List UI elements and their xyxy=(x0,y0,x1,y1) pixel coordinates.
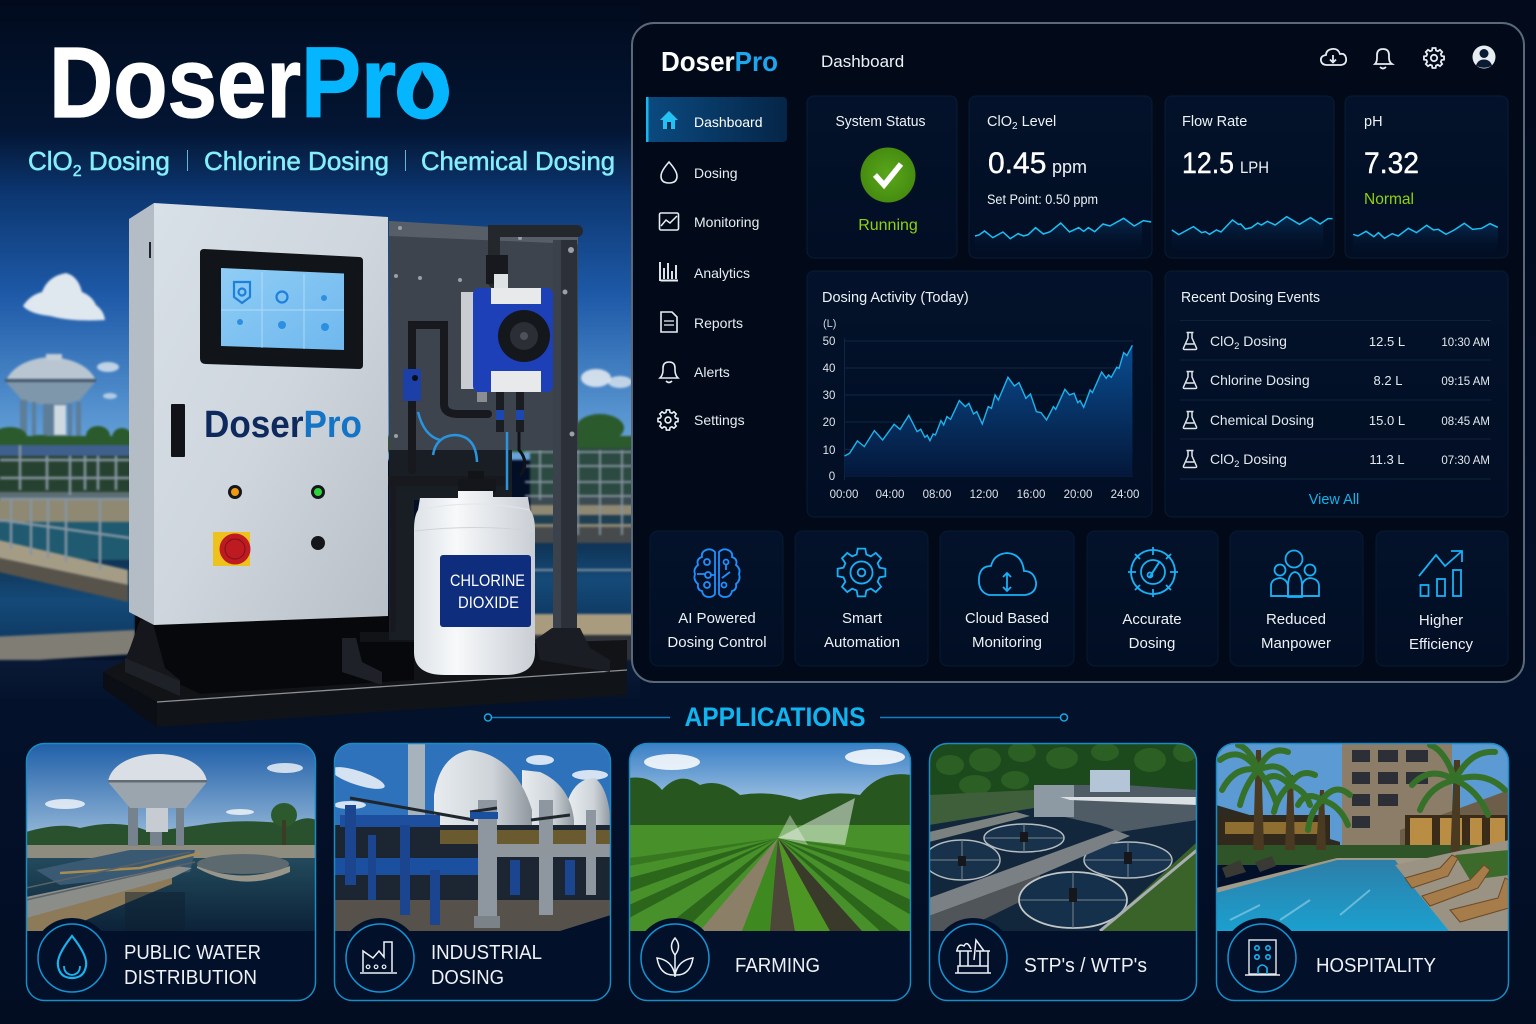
title logo: DoserPro: Doser xyxy=(49,27,301,139)
feature: AI powered dosing control xyxy=(650,531,783,666)
right plant and piers xyxy=(524,448,631,661)
event row 4 xyxy=(1183,450,1490,470)
nav: Analytics: Analytics xyxy=(694,265,750,281)
subtitle: dosing types: Dosing xyxy=(82,146,170,176)
card: ClO2 level: Set Point: 0.50 ppm xyxy=(987,192,1098,207)
event row 1: 12.5 L xyxy=(1369,334,1405,349)
panel: dosing activity chart: (L) xyxy=(823,318,836,330)
feature: smart automation: Smart xyxy=(842,610,883,627)
card: pH xyxy=(1345,96,1508,258)
event row 4: 2 xyxy=(1234,459,1239,470)
feature: reduced manpower: Manpower xyxy=(1261,635,1331,652)
nav: Analytics xyxy=(660,262,750,281)
event row 2 xyxy=(1183,372,1490,388)
photo: industrial pipes and tanks xyxy=(329,743,611,931)
x axis labels: 16:00 xyxy=(1017,489,1045,501)
nav: Monitoring xyxy=(660,213,759,230)
card label: PUBLIC WATER xyxy=(124,941,261,964)
badge icon: water drop xyxy=(32,918,112,998)
application card: public water distribution xyxy=(26,743,316,1001)
hero background scene: treatment plant and sky xyxy=(0,41,639,678)
door handle xyxy=(171,404,185,457)
card label xyxy=(431,941,542,989)
sparkline xyxy=(975,218,1151,253)
x axis labels: 12:00 xyxy=(970,489,998,501)
pipes xyxy=(389,231,577,630)
card: flow rate xyxy=(1165,96,1334,258)
card: ClO2 level xyxy=(969,96,1152,258)
subtitle: dosing types xyxy=(28,146,615,180)
feature: AI powered dosing control: Dosing Control xyxy=(667,634,767,651)
horizon trees xyxy=(0,414,650,452)
subtitle: dosing types: Chemical Dosing xyxy=(421,146,615,176)
x axis labels xyxy=(830,489,1139,501)
base platform xyxy=(103,640,627,727)
event row 3: Chemical Dosing xyxy=(1210,412,1314,428)
chemical tank: chlorine dioxide xyxy=(414,471,535,675)
application card: industrial dosing xyxy=(329,743,611,1001)
icon: brain xyxy=(694,549,740,597)
panel: dosing activity chart xyxy=(807,271,1152,517)
application card: hospitality xyxy=(1216,743,1509,1001)
feature: AI powered dosing control: AI Powered xyxy=(678,610,756,627)
subtitle: dosing types: ClO xyxy=(28,146,73,176)
dashboard heading: Dashboard xyxy=(821,52,904,71)
photo: water tower and clarifier xyxy=(26,743,316,931)
icon: cloud xyxy=(979,553,1036,595)
x axis labels: 20:00 xyxy=(1064,489,1092,501)
icon: settings gear xyxy=(1424,48,1444,68)
icon: running check xyxy=(860,148,916,202)
link: view all: View All xyxy=(1309,492,1359,508)
nav: Alerts xyxy=(660,362,730,382)
card label: FARMING xyxy=(735,954,820,977)
x axis labels: 08:00 xyxy=(923,489,951,501)
event row 3: 15.0 L xyxy=(1369,413,1405,428)
touch screen xyxy=(200,249,363,369)
card: flow rate: Flow Rate xyxy=(1182,114,1247,130)
nav: Dosing: Dosing xyxy=(694,165,738,181)
card: pH: 7.32 xyxy=(1364,147,1419,180)
card label: DISTRIBUTION xyxy=(124,966,257,989)
cabinet xyxy=(129,203,388,625)
sidebar navigation xyxy=(646,97,787,430)
support frame under cabinet xyxy=(125,610,414,696)
badge icon: treatment plant xyxy=(933,918,1013,998)
event row 3 xyxy=(1183,412,1490,428)
y axis labels: 40 xyxy=(823,363,835,375)
card: flow rate: 12.5 xyxy=(1182,147,1234,180)
icon: target xyxy=(1128,547,1178,597)
nav: Monitoring: Monitoring xyxy=(694,214,759,230)
x axis labels: 00:00 xyxy=(830,489,858,501)
cyan tubes xyxy=(418,412,507,490)
event row 4: ClO xyxy=(1210,451,1234,467)
emergency stop button xyxy=(213,532,250,566)
nav: Reports xyxy=(661,312,743,332)
y axis labels: 30 xyxy=(823,390,835,402)
application card: STPs and WTPs xyxy=(924,742,1197,1001)
card: ClO2 level: 2 xyxy=(1012,121,1018,132)
card: ClO2 level: 0.45 xyxy=(988,147,1046,180)
feature: accurate dosing xyxy=(1087,531,1218,666)
water tower xyxy=(5,354,96,448)
card label: STP's / WTP's xyxy=(1024,954,1147,977)
photo: crop field with sprinkler xyxy=(629,743,911,931)
y axis labels: 50 xyxy=(823,336,835,348)
feature: reduced manpower: Reduced xyxy=(1266,611,1326,628)
nav: Dosing xyxy=(661,162,738,183)
photo: treatment clarifiers xyxy=(924,742,1197,931)
event row 2: Chlorine Dosing xyxy=(1210,372,1310,388)
panel: dosing activity chart: Dosing Activity (Today) xyxy=(822,290,969,306)
event row 1: ClO xyxy=(1210,333,1234,349)
tank label: CHLORINE xyxy=(450,571,525,590)
sparkline xyxy=(1353,223,1498,253)
machine: DoserPro dosing skid xyxy=(103,203,627,727)
title logo: DoserPro: Pro xyxy=(301,27,451,139)
card: ClO2 level: Level xyxy=(1018,114,1056,130)
feature: higher efficiency: Higher xyxy=(1419,612,1463,629)
left plant and piers xyxy=(0,445,135,663)
card: ClO2 level: ClO xyxy=(987,114,1012,130)
nav active: Dashboard xyxy=(646,97,787,142)
event row 1: 2 xyxy=(1234,341,1239,352)
clouds xyxy=(23,273,632,399)
badge icon: hotel building xyxy=(1222,918,1302,998)
heading: applications xyxy=(484,702,1068,732)
badge icon: factory xyxy=(340,918,420,998)
x axis labels: 24:00 xyxy=(1111,489,1139,501)
icon: gear xyxy=(838,549,885,596)
panel: recent dosing events xyxy=(1165,271,1508,517)
event row 2: 8.2 L xyxy=(1374,373,1402,388)
card: system status: System Status xyxy=(836,114,926,130)
nav: Reports: Reports xyxy=(694,315,743,331)
feature: cloud based monitoring: Cloud Based xyxy=(965,610,1049,627)
card: pH: Normal xyxy=(1364,191,1414,208)
icon: people xyxy=(1271,550,1319,597)
event row 4: Dosing xyxy=(1239,451,1287,467)
nav: Alerts: Alerts xyxy=(694,364,730,380)
tank label: DIOXIDE xyxy=(458,593,519,612)
nav: Settings: Settings xyxy=(694,412,745,428)
panel: recent dosing events: Recent Dosing Events xyxy=(1181,290,1320,306)
x axis labels: 04:00 xyxy=(876,489,904,501)
event row 4: 07:30 AM xyxy=(1441,455,1490,467)
feature: smart automation xyxy=(795,531,928,666)
card label: DOSING xyxy=(431,966,504,989)
nav active: Dashboard: Dashboard xyxy=(694,114,762,130)
card: pH: pH xyxy=(1364,114,1383,130)
y axis labels: 20 xyxy=(823,417,835,429)
dosing pump xyxy=(461,274,553,432)
back plate xyxy=(389,221,610,672)
event row 1: Dosing xyxy=(1239,333,1287,349)
application card: farming xyxy=(629,743,911,1001)
card: flow rate: LPH xyxy=(1240,158,1269,177)
event row 4: 11.3 L xyxy=(1369,452,1405,467)
injection valve xyxy=(403,369,421,401)
event row 3: 08:45 AM xyxy=(1441,416,1490,428)
icon: growth chart xyxy=(1419,551,1462,596)
card label: INDUSTRIAL xyxy=(431,941,542,964)
panel: dashboard window xyxy=(632,23,1524,682)
feature: cloud based monitoring xyxy=(940,531,1074,666)
y axis labels xyxy=(823,336,835,483)
feature: cloud based monitoring: Monitoring xyxy=(972,634,1042,651)
photo: hotel and pool xyxy=(1216,743,1509,931)
icon: notification bell xyxy=(1375,49,1392,68)
cabinet logo: DoserPro xyxy=(204,404,362,446)
card label xyxy=(124,941,261,989)
feature: higher efficiency xyxy=(1376,531,1508,666)
subtitle: dosing types: 2 xyxy=(73,163,82,180)
icon: user avatar xyxy=(1472,46,1496,68)
tank label xyxy=(440,555,531,627)
feature: accurate dosing: Dosing xyxy=(1129,635,1175,652)
event row 1 xyxy=(1183,332,1490,352)
card: system status xyxy=(807,96,957,258)
event row 2: 09:15 AM xyxy=(1441,376,1490,388)
feature: smart automation: Automation xyxy=(824,634,900,651)
area line chart xyxy=(845,345,1132,476)
y axis labels: 0 xyxy=(829,471,835,483)
icon: cloud xyxy=(1321,49,1346,65)
card: ClO2 level: ppm xyxy=(1052,157,1087,177)
card: system status: Running xyxy=(858,217,918,234)
feature: reduced manpower xyxy=(1230,531,1363,666)
nav: Settings xyxy=(658,410,745,430)
y axis labels: 10 xyxy=(823,445,835,457)
indicator lights xyxy=(228,485,325,550)
heading: applications: APPLICATIONS xyxy=(684,702,866,732)
subtitle: dosing types: Chlorine Dosing xyxy=(204,146,389,176)
dashboard logo: DoserPro xyxy=(661,46,778,77)
sparkline xyxy=(1172,217,1333,253)
feature: higher efficiency: Efficiency xyxy=(1409,636,1473,653)
feature: accurate dosing: Accurate xyxy=(1122,611,1182,628)
card label: HOSPITALITY xyxy=(1316,954,1436,977)
badge icon: plant xyxy=(635,918,715,998)
event row 1: 10:30 AM xyxy=(1441,337,1490,349)
